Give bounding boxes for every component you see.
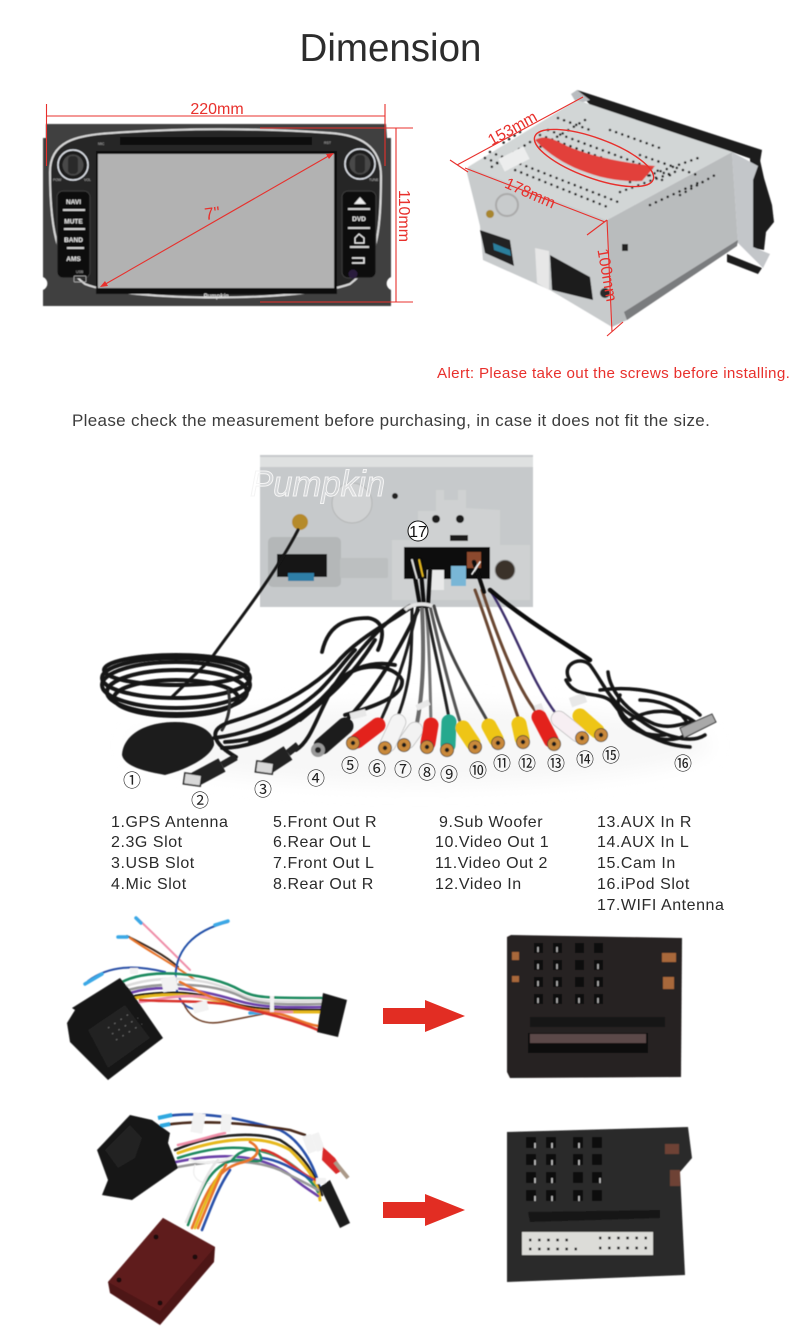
USB slot 2 [183, 757, 236, 786]
legend column 4: 15.Cam In [597, 855, 676, 872]
circled port numbers: ⑬ [547, 750, 565, 776]
circled port numbers: ② [191, 787, 209, 813]
circled port numbers: ① [123, 767, 141, 793]
legend column 3: 9.Sub Woofer [439, 814, 543, 831]
GPS cable and coil [102, 530, 298, 730]
GPS antenna puck [122, 722, 214, 775]
large black connector [67, 978, 163, 1080]
cable tie [405, 604, 432, 610]
circled port numbers: ⑤ [341, 752, 359, 778]
small black connector [320, 1180, 350, 1228]
chassis photo [467, 90, 774, 327]
circled port numbers: ⑥ [368, 755, 386, 781]
screen [98, 154, 334, 288]
left buttons: MUTE [64, 218, 83, 226]
red terminal [322, 1147, 348, 1178]
legend column 2: 5.Front Out R [273, 814, 377, 831]
rear plate [260, 455, 533, 607]
legend column 4 [597, 814, 724, 914]
iPod connector [680, 714, 716, 738]
pin highlights [535, 1143, 600, 1201]
circled port numbers: ⑭ [576, 746, 594, 772]
legend column 4: 13.AUX In R [597, 814, 692, 831]
wiring harness 2 [97, 1112, 350, 1325]
legend column 2: 6.Rear Out L [273, 834, 371, 851]
callout number 17: 17 [409, 524, 427, 541]
wire bundle [122, 973, 322, 1030]
legend column 1 [111, 814, 228, 893]
panel: perspective view of unit chassis [450, 90, 774, 336]
circled port numbers: ⑩ [469, 757, 487, 783]
measurement note: Please check the measurement before purchasing, in case it does not fit the size. [72, 411, 710, 430]
pin highlights [538, 947, 598, 1003]
labels and ties [130, 968, 274, 1014]
head unit photo: RST [324, 141, 332, 145]
legend column 2 [273, 814, 377, 893]
circled port numbers: ⑯ [674, 750, 692, 776]
head unit photo: POW [53, 178, 62, 182]
vent holes [485, 118, 715, 208]
wire tags [349, 693, 587, 720]
loose wires [88, 918, 268, 1023]
circled port numbers: ⑧ [418, 759, 436, 785]
terminal slot [528, 1033, 648, 1053]
warning sticker [535, 138, 655, 181]
label 178mm: 178mm [502, 175, 558, 213]
circled port numbers: ③ [254, 776, 272, 802]
connector view 1 [507, 935, 682, 1078]
head unit photo: TUNE [369, 178, 379, 182]
arrow 2 [383, 1194, 465, 1226]
plug harness wires on unit [412, 560, 484, 606]
head unit photo: USB [76, 270, 84, 274]
head unit photo: Pumpkin [203, 294, 229, 300]
red module box [108, 1218, 215, 1325]
RCA plugs 5 to 15 [357, 716, 597, 745]
contact pins [534, 943, 603, 1004]
circled port numbers: ⑫ [518, 750, 536, 776]
height dimension 110mm [260, 128, 413, 302]
blue terminals [85, 918, 270, 1013]
left knob [58, 150, 88, 180]
blue terminals [158, 1115, 172, 1126]
legend column 3: 11.Video Out 2 [435, 855, 548, 872]
lower wires to module [186, 1142, 261, 1230]
watermark logo: Pumpkin [250, 463, 385, 504]
left buttons: BAND [64, 237, 83, 244]
head unit photo: MIC [98, 142, 105, 146]
panel: front view of head unit with dimensions [43, 101, 413, 306]
upper wires [160, 1114, 322, 1200]
wiring harness 1 [67, 918, 347, 1080]
left buttons: AMS [66, 256, 81, 263]
black connector [97, 1115, 178, 1200]
legend column 1: 3.USB Slot [111, 855, 195, 872]
RCA wire bundle [380, 590, 590, 728]
legend column 1: 2.3G Slot [111, 834, 183, 851]
USB cables with loops [214, 606, 418, 757]
circled port numbers: ④ [307, 765, 325, 791]
moulded ledge [528, 1210, 660, 1222]
port legend [111, 814, 724, 914]
mic jack [311, 726, 345, 757]
legend column 1: 4.Mic Slot [111, 876, 187, 893]
circled port numbers: ⑦ [394, 756, 412, 782]
RCA tips [346, 728, 608, 756]
legend column 2: 8.Rear Out R [273, 876, 374, 893]
red highlight ellipse [528, 118, 660, 198]
legend column 3: 10.Video Out 1 [435, 834, 549, 851]
USB slot 3 [255, 745, 298, 774]
right buttons [342, 191, 376, 278]
head unit photo: VOL [84, 178, 91, 182]
legend column 4: 16.iPod Slot [597, 876, 690, 893]
side tabs [665, 1144, 680, 1186]
right buttons: DVD [352, 216, 366, 223]
side tabs [512, 952, 676, 989]
labels [190, 1112, 326, 1184]
legend column 4: 17.WIFI Antenna [597, 897, 724, 914]
connector view 2 [507, 1127, 692, 1282]
arrow 1 [383, 1000, 465, 1032]
left buttons [57, 191, 90, 278]
floor shadow [130, 705, 710, 785]
panel: rear connections photo [102, 455, 716, 813]
diagonal dimension 7 inch: 7" [203, 203, 221, 224]
RCA plug outlines for white bodies [388, 719, 578, 744]
connector recesses [480, 230, 514, 266]
circled port numbers: ⑪ [493, 750, 511, 776]
white terminal block [522, 1232, 653, 1255]
diagonal dimension 7 inch [100, 153, 334, 287]
dimension lines [450, 97, 660, 336]
circled port numbers: ⑮ [602, 742, 620, 768]
legend column 4: 14.AUX In L [597, 834, 689, 851]
legend column 3: 12.Video In [435, 876, 522, 893]
right knob [345, 149, 375, 179]
contact pins [526, 1137, 602, 1201]
moulded ledge [530, 1017, 665, 1027]
cables and plugs [102, 530, 716, 786]
label 100mm: 100mm [593, 247, 619, 303]
circled port numbers: ⑨ [440, 761, 458, 787]
legend column 3 [435, 814, 549, 893]
width dimension 220mm [46, 101, 385, 166]
left buttons: NAVI [66, 199, 81, 206]
alert note: Alert: Please take out the screws before installing. [437, 365, 790, 382]
legend column 2: 7.Front Out L [273, 855, 374, 872]
circled port numbers [123, 742, 692, 813]
legend column 1: 1.GPS Antenna [111, 814, 228, 831]
small black connector [317, 993, 347, 1037]
iPod cable coil [566, 661, 705, 747]
RCA bores [351, 733, 603, 752]
width dimension 220mm: 220mm [190, 101, 244, 118]
label 153mm: 153mm [485, 109, 540, 149]
height dimension 110mm: 110mm [395, 190, 412, 242]
head unit photo [43, 124, 391, 306]
title: Dimension [300, 27, 481, 70]
